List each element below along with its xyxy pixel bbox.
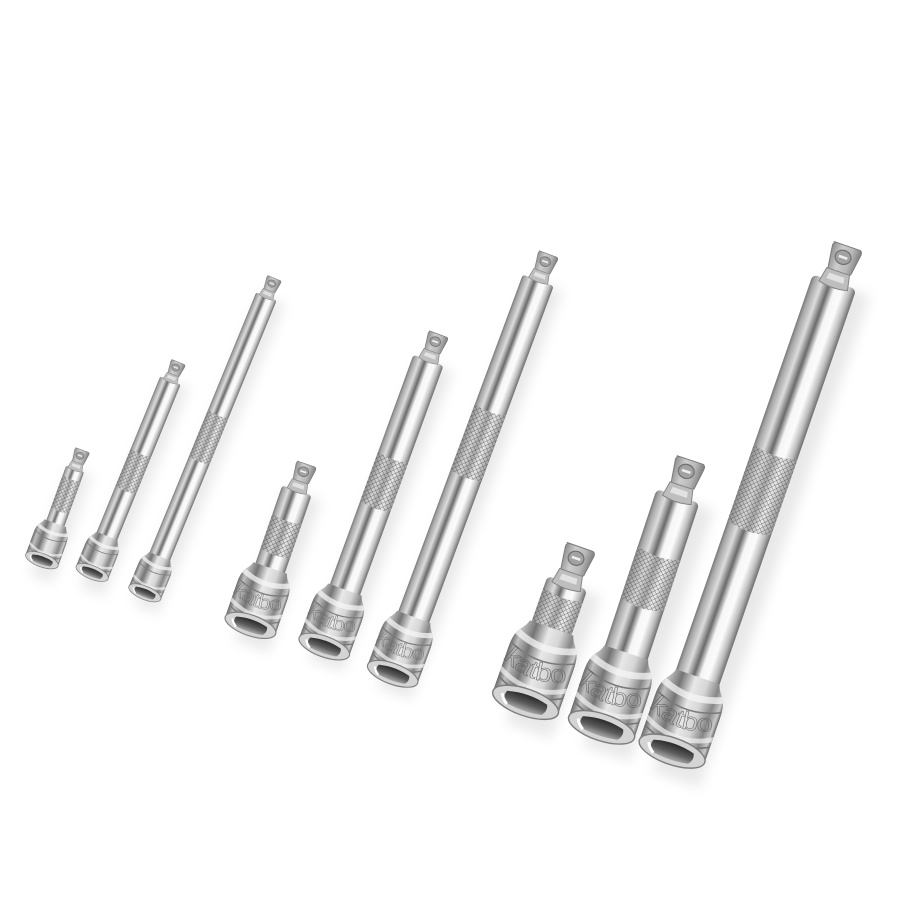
shadow [583, 494, 714, 762]
socket head [568, 646, 652, 745]
shadow [506, 581, 601, 738]
socket head [638, 669, 723, 769]
socket head [492, 620, 577, 720]
socket head [125, 549, 177, 606]
knurled grip [51, 475, 81, 515]
square drive [287, 461, 316, 496]
tool: medium extension 2 [298, 330, 451, 670]
tool: large extension 2 [568, 455, 712, 760]
knurled grip [260, 514, 302, 560]
brand text: katbo [233, 582, 282, 611]
shadow [30, 467, 92, 583]
shaft [524, 576, 587, 658]
shadow [80, 378, 189, 596]
brand text: katbo [578, 671, 641, 708]
square drive [528, 250, 558, 286]
tool: medium extension 1 [224, 460, 320, 651]
shaft [323, 355, 443, 615]
square drive [259, 275, 282, 301]
shaft [596, 489, 699, 685]
socket head [73, 529, 124, 586]
tool: large extension 3 [638, 241, 868, 786]
socket head [298, 584, 364, 660]
brand text: katbo [650, 694, 712, 732]
square drive [163, 359, 186, 385]
shaft [146, 292, 277, 569]
square drive [418, 331, 448, 366]
socket head [366, 610, 433, 688]
square drive [818, 241, 862, 293]
tool: small extension 3 [122, 271, 293, 614]
brand text: katbo [504, 646, 566, 684]
knurled grip [450, 404, 506, 483]
square drive [662, 455, 705, 507]
shaft [42, 466, 84, 538]
tool: small extension 1 [19, 444, 99, 583]
brand text: katbo [308, 602, 356, 632]
knurled grip [620, 546, 681, 615]
shaft [250, 485, 312, 590]
knurled grip [189, 410, 228, 466]
shadow [134, 294, 285, 614]
tool: large extension 1 [492, 542, 600, 737]
square drive [551, 542, 595, 594]
knurled grip [360, 452, 408, 514]
socket head [224, 562, 290, 639]
shaft [391, 275, 554, 642]
shadow [377, 279, 562, 699]
knurled grip [726, 444, 797, 539]
brand text: katbo [376, 630, 424, 660]
shadow [235, 489, 321, 652]
shadow [652, 280, 870, 788]
socket head [22, 517, 72, 573]
knurled grip [115, 449, 151, 495]
shaft [94, 376, 181, 547]
shadow [309, 359, 452, 672]
square drive [67, 447, 90, 473]
shaft [667, 274, 856, 712]
tool: medium extension 3 [366, 250, 560, 698]
knurled grip [529, 587, 583, 643]
tool: small extension 2 [69, 355, 197, 596]
